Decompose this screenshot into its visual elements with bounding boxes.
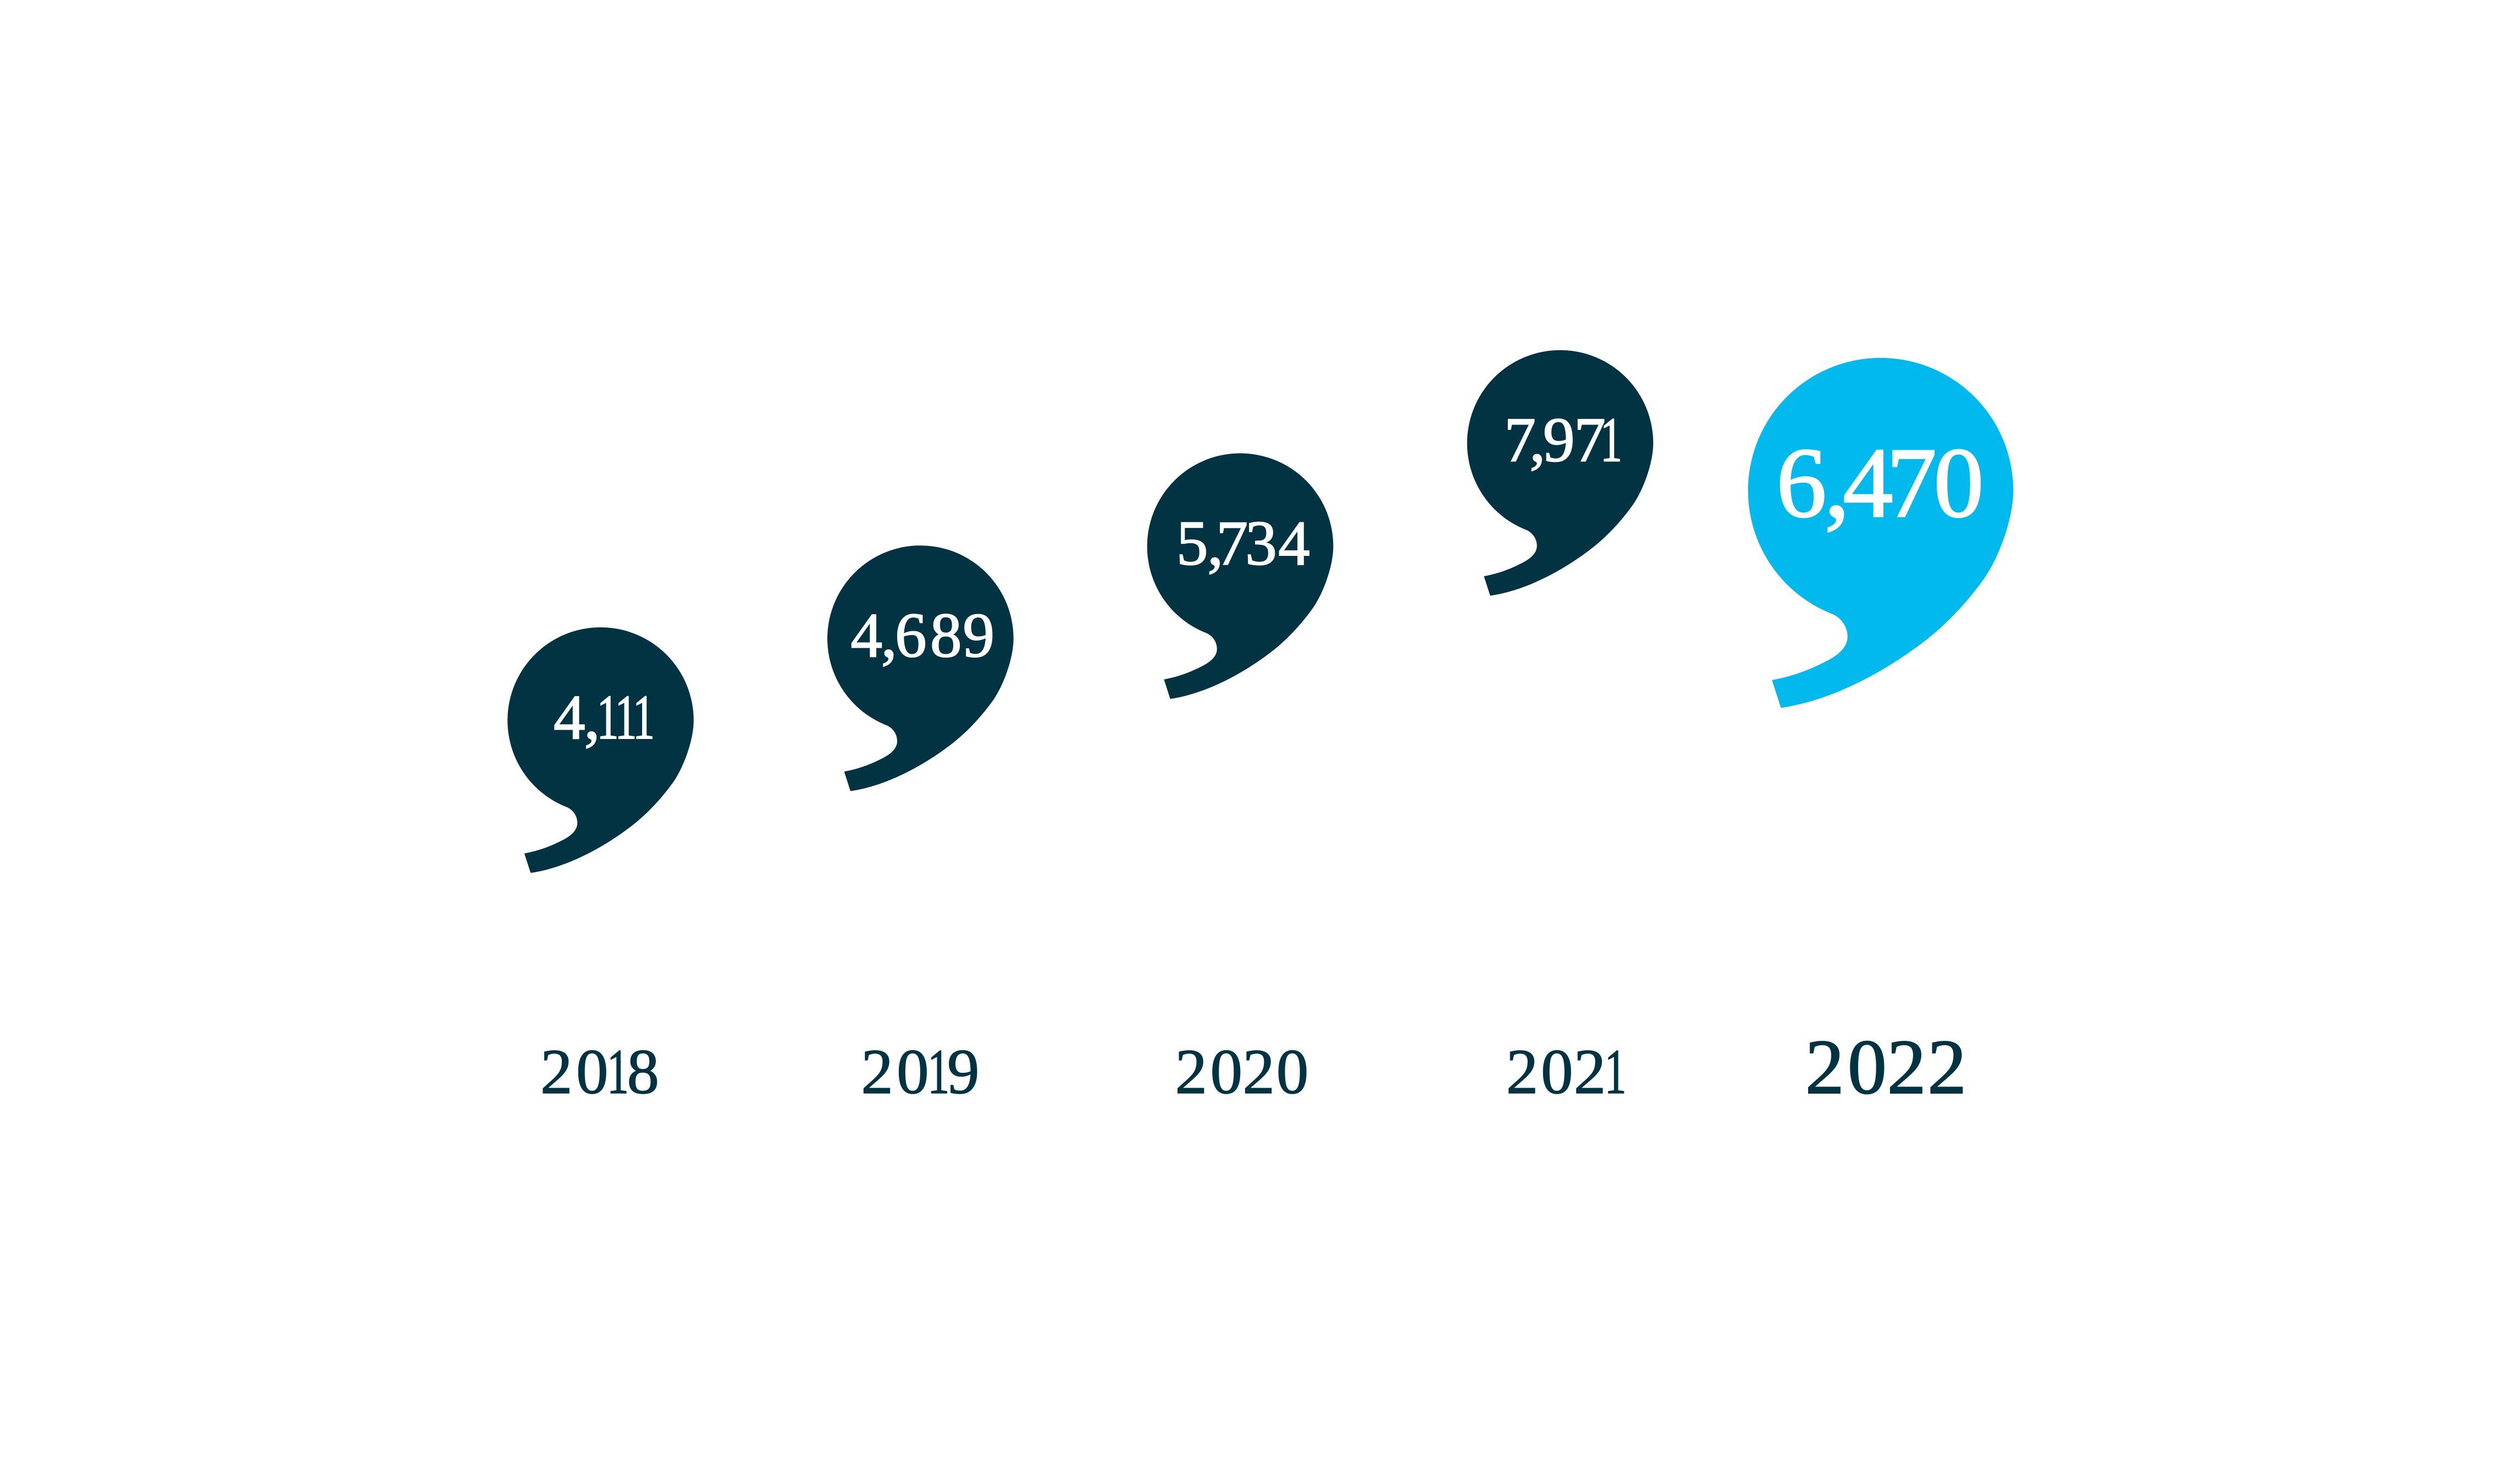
icon: 2019 comma-shaped bubble <box>827 545 1014 791</box>
value: 2018: 4 <box>554 682 585 752</box>
icon: 2018 comma-shaped bubble <box>507 627 694 873</box>
value: 2021: 9 <box>1543 405 1574 475</box>
year label: 2019: 0 <box>897 1036 929 1107</box>
value: 2021: 7 <box>1504 405 1536 475</box>
value: 2018: , <box>584 682 600 752</box>
bubble: 2018 value <box>507 627 694 873</box>
year label: 2021: 1 <box>1605 1036 1627 1107</box>
value: 2021: , <box>1529 405 1545 475</box>
year label: 2018: 1 <box>607 1036 629 1107</box>
bubble: 2020 value <box>1147 453 1333 699</box>
icon: 2022 comma-shaped bubble <box>1748 358 2013 708</box>
icon: 2020 comma-shaped bubble <box>1147 453 1333 699</box>
year label: 2019: 1 <box>927 1036 949 1107</box>
year label: 2019: 9 <box>947 1036 979 1107</box>
value: 2022: 6,470 <box>1777 428 1983 538</box>
year label: 2021: 2 <box>1506 1036 1538 1107</box>
value: 2018: 1 <box>615 682 637 752</box>
value: 2021: 7 <box>1574 405 1606 475</box>
year label: 2018: 8 <box>627 1036 659 1107</box>
year label: 2018: 2 <box>540 1036 573 1107</box>
icon: 2021 comma-shaped bubble <box>1467 350 1653 595</box>
year label: 2019: 2 <box>861 1036 893 1107</box>
value: 2020: 5,734 <box>1176 509 1310 578</box>
year label: 2021: 2 <box>1574 1036 1606 1107</box>
value: 2018: 1 <box>597 682 619 752</box>
year label: 2022: 2022 <box>1805 1023 1966 1110</box>
bubble: 2022 highlighted value <box>1748 358 2013 708</box>
bubble: 2019 value <box>827 545 1014 791</box>
value: 2021: 1 <box>1600 405 1622 475</box>
value: 2019: 4,689 <box>851 600 994 670</box>
year label: 2020: 2020 <box>1175 1036 1308 1107</box>
value: 2018: 1 <box>633 682 655 752</box>
year label: 2021: 0 <box>1541 1036 1573 1107</box>
year label: 2018: 0 <box>576 1036 608 1107</box>
bubble: 2021 value <box>1467 350 1653 595</box>
